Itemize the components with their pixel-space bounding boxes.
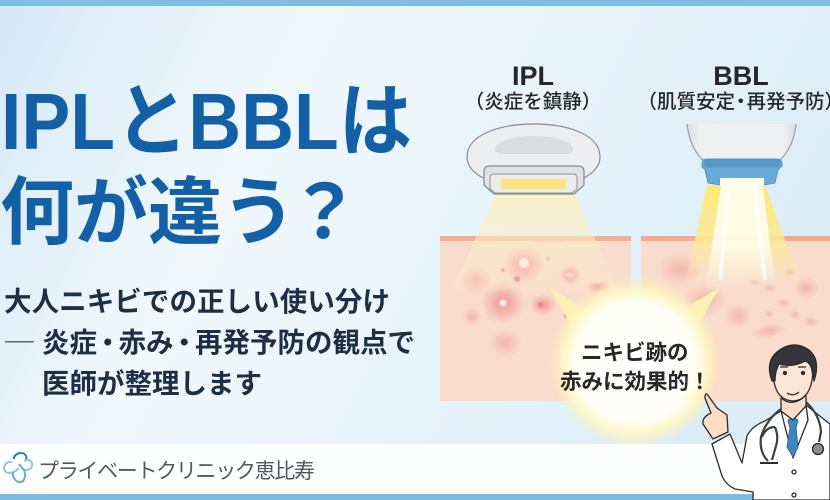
- title: 何が違う？: [0, 171, 361, 254]
- light beam: BBL: [685, 180, 801, 290]
- IPL label: IPL: [512, 61, 554, 91]
- icon: clinic logo: [4, 453, 32, 482]
- title: IPLとBBLは: [1, 77, 412, 166]
- icon: IPL handpiece: [467, 124, 600, 194]
- red acne marks: [503, 245, 545, 283]
- callout text: ニキビ跡の: [581, 341, 689, 365]
- coat: [712, 405, 830, 500]
- stethoscope: [761, 402, 821, 461]
- title: [0, 77, 412, 254]
- BBL label: [638, 61, 830, 113]
- subtitle text block: [4, 286, 415, 399]
- BBL label: BBL: [713, 61, 769, 91]
- panel: IPL skin: [440, 236, 631, 401]
- IPL label: [465, 61, 601, 113]
- hair: [769, 345, 817, 381]
- shirt: [781, 405, 808, 458]
- hand pointing: [703, 394, 728, 439]
- top band: [0, 0, 830, 6]
- clinic name: プライベートクリニック恵比寿: [38, 460, 315, 483]
- subtitle text block: 医師が整理します: [42, 368, 262, 399]
- icon: doctor illustration: [703, 345, 830, 500]
- subtitle text block: 炎症・赤み・再発予防の観点で: [42, 327, 415, 358]
- light beam: IPL: [452, 191, 618, 290]
- callout: effect highlight: [549, 276, 721, 448]
- eyes and mouth: [784, 372, 786, 374]
- footer bar: [0, 444, 830, 500]
- panel: BBL skin: [641, 236, 830, 401]
- subtitle text block: 大人ニキビでの正しい使い分け: [4, 286, 390, 317]
- tie: [787, 417, 798, 457]
- callout text: 赤みに効果的！: [560, 370, 711, 394]
- callout text: [560, 341, 711, 394]
- IPL label: （炎症を鎮静）: [465, 91, 601, 113]
- face: [773, 358, 813, 401]
- coat buttons: [792, 470, 796, 474]
- icon: BBL handpiece: [687, 124, 796, 186]
- faded redness marks: [658, 253, 702, 285]
